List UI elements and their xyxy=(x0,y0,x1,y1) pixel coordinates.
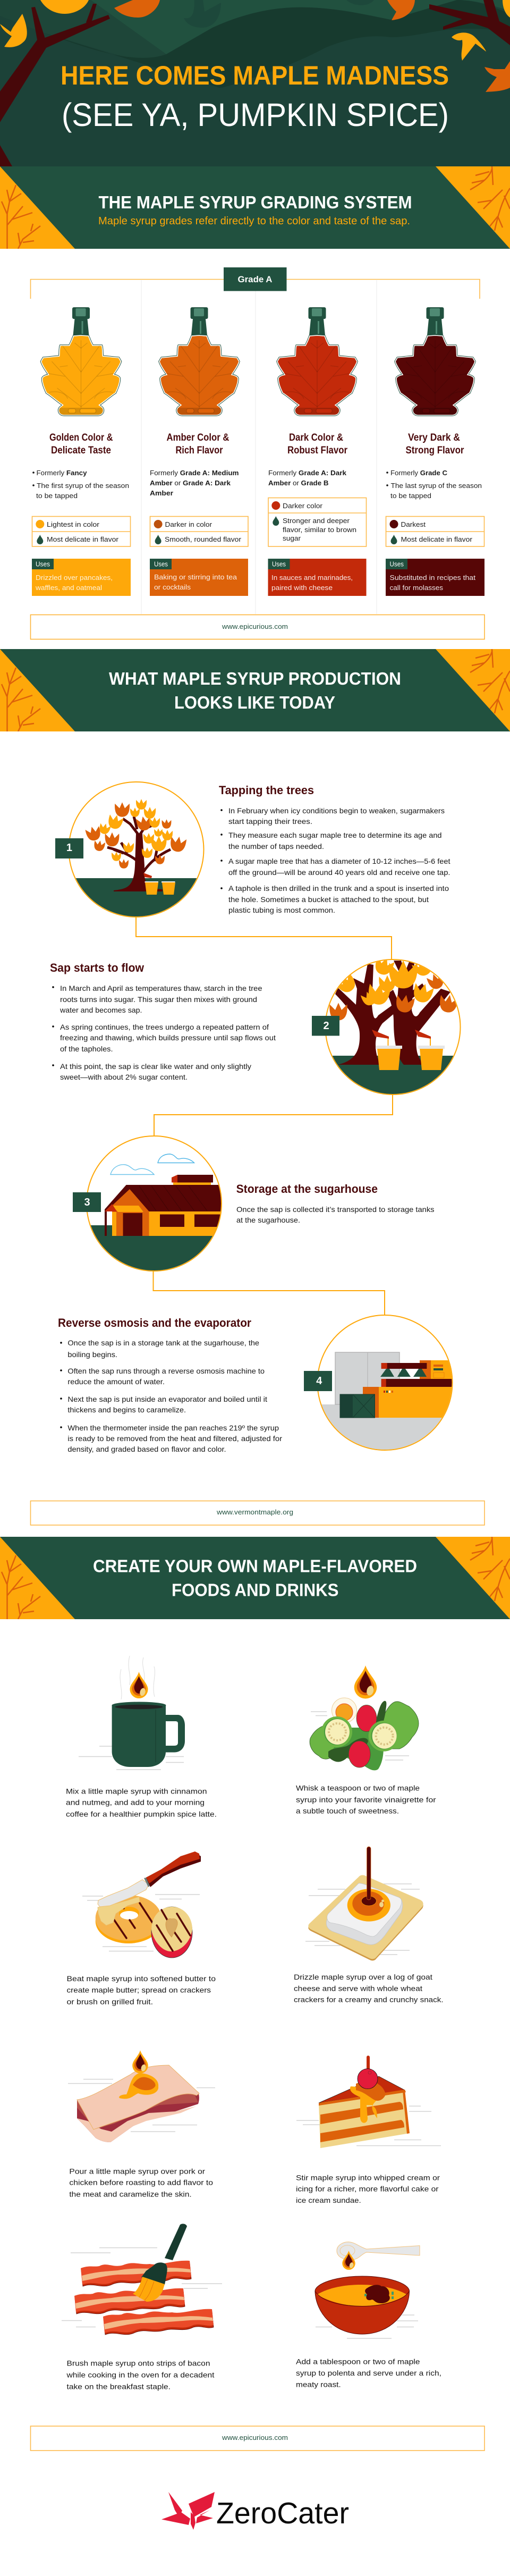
icon: faint leaves xyxy=(184,0,374,28)
step number 2: 2 xyxy=(323,1020,329,1032)
subheading: Maple syrup grades refer directly to the color and taste of the sap. xyxy=(98,215,410,227)
food 6: layered cake xyxy=(296,2056,441,2148)
traits box xyxy=(32,517,131,546)
uses box: paired with cheese xyxy=(271,584,333,592)
source box: epicurious: www.epicurious.com xyxy=(222,622,288,630)
uses box xyxy=(386,559,484,596)
food 4 text: cheese and serve with whole wheat xyxy=(294,1984,422,1992)
section banner: foods and drinks xyxy=(0,1537,510,1619)
icon: amber bottle xyxy=(159,307,239,415)
heading xyxy=(406,432,464,456)
bullets: freezing and thawing, which builds pressure until sap flows out xyxy=(60,1033,276,1042)
food 2 text: a subtle touch of sweetness. xyxy=(296,1806,399,1815)
step number 1 xyxy=(55,838,83,858)
step number 4: 4 xyxy=(316,1375,322,1387)
heading: Reverse osmosis and the evaporator xyxy=(58,1316,251,1329)
uses box: Uses xyxy=(272,560,286,568)
food 7: bacon and brush xyxy=(62,2224,222,2335)
uses box: Uses xyxy=(154,560,168,568)
food 2: salad xyxy=(310,1665,419,1770)
heading: THE MAPLE SYRUP GRADING SYSTEM xyxy=(99,192,412,212)
step 1 illustration: tree xyxy=(69,781,204,917)
heading: Storage at the sugarhouse xyxy=(236,1182,378,1196)
traits box: Darkest xyxy=(401,520,426,528)
uses box: Drizzled over pancakes, xyxy=(36,574,113,582)
heading: LOOKS LIKE TODAY xyxy=(174,693,335,712)
panel: dark grade xyxy=(268,307,367,596)
heading: Robust Flavor xyxy=(287,445,348,456)
food 3 text: or brush on grilled fruit. xyxy=(67,1998,153,2006)
uses box: Baking or stirring into tea xyxy=(154,573,237,581)
food 8 text: syrup to polenta and serve under a rich, xyxy=(296,2369,441,2377)
title: HERE COMES MAPLE MADNESS xyxy=(61,61,449,90)
heading xyxy=(109,669,401,712)
description xyxy=(268,469,347,487)
heading: Tapping the trees xyxy=(219,784,314,797)
bullets: the hole. Sometimes a bucket is attached to the spout, but xyxy=(228,895,429,904)
traits box: Darker color xyxy=(283,502,323,510)
step 2 text xyxy=(50,961,276,1081)
paragraph: at the sugarhouse. xyxy=(236,1216,300,1224)
food 6 text xyxy=(296,2173,440,2204)
food 7 text xyxy=(66,2359,215,2391)
description: Formerly Fancy xyxy=(36,469,87,477)
arrow: connector 1 to 2 xyxy=(136,917,392,959)
paragraph: Once the sap is collected it’s transported to storage tanks xyxy=(236,1205,435,1214)
uses box: waffles, and oatmeal xyxy=(35,584,102,592)
bullets: plastic tubing is most common. xyxy=(228,906,335,914)
bullets: In March and April as temperatures thaw, starch in the tree xyxy=(60,984,262,992)
right tree xyxy=(429,0,510,45)
food 7 text: Brush maple syrup onto strips of bacon xyxy=(67,2359,210,2368)
panel: amber grade xyxy=(150,307,248,596)
bullets: A sugar maple tree that has a diameter of 10-12 inches—5-6 feet xyxy=(228,857,450,865)
traits box: Most delicate in flavor xyxy=(401,535,473,543)
bullets: Next the sap is put inside an evaporator and boiled until it xyxy=(67,1395,267,1403)
food 3 text: Beat maple syrup into softened butter to xyxy=(67,1974,216,1983)
traits box: flavor, similar to brown xyxy=(283,526,356,534)
step 1 text xyxy=(219,784,450,914)
traits box: Most delicate in flavor xyxy=(47,535,119,543)
food 7 text: while cooking in the oven for a decadent xyxy=(66,2371,215,2379)
traits box xyxy=(386,517,484,546)
bullets: start tapping their trees. xyxy=(228,817,312,826)
bullets: At this point, the sap is clear like water and only slightly xyxy=(60,1062,251,1071)
food 6 text: Stir maple syrup into whipped cream or xyxy=(296,2173,440,2182)
food 5 text xyxy=(69,2167,213,2199)
uses box: call for molasses xyxy=(390,584,444,592)
step number 4 xyxy=(304,1371,332,1391)
step 4 text xyxy=(58,1316,282,1453)
heading: Strong Flavor xyxy=(406,445,464,456)
description: Amber xyxy=(150,489,173,497)
heading xyxy=(49,432,113,456)
heading: Golden Color & xyxy=(49,432,113,443)
heading: Dark Color & xyxy=(289,432,343,443)
grade label: Grade A xyxy=(238,274,272,284)
icon: golden bottle xyxy=(41,307,121,415)
panel: golden grade xyxy=(32,307,131,596)
food 1 text: Mix a little maple syrup with cinnamon xyxy=(66,1787,207,1796)
traits box: sugar xyxy=(283,534,301,542)
bullets: When the thermometer inside the pan reaches 219º the syrup xyxy=(67,1424,279,1432)
bullets: water and becomes sap. xyxy=(60,1006,142,1014)
bullets: is ready to be removed from the heat and filtered, adjusted for xyxy=(67,1434,282,1443)
heading: Very Dark & xyxy=(408,432,460,443)
description: Amber or Grade A: Dark xyxy=(150,479,231,487)
bullets: sweet—with about 2% sugar content. xyxy=(60,1073,188,1081)
grade A frame xyxy=(31,267,480,614)
step number 3 xyxy=(73,1192,101,1212)
food 3: maple butter and grilled fruit xyxy=(82,1851,201,1958)
uses box: Substituted in recipes that xyxy=(390,574,475,582)
heading: CREATE YOUR OWN MAPLE-FLAVORED xyxy=(93,1556,417,1576)
step number 3: 3 xyxy=(84,1197,90,1208)
step 3 illustration: sugarhouse xyxy=(85,1136,228,1273)
food 4: goat cheese cracker xyxy=(305,1847,423,1960)
paragraph xyxy=(236,1205,435,1224)
description: Amber or Grade B xyxy=(268,479,328,487)
left tree xyxy=(0,4,110,166)
food 7 text: take on the breakfast staple. xyxy=(67,2383,171,2391)
traits box: Smooth, rounded flavor xyxy=(165,535,242,543)
traits box: Lightest in color xyxy=(47,520,100,528)
bullets: off the ground—will be around 40 years old and receive one tap. xyxy=(228,868,450,877)
title xyxy=(61,61,449,133)
food 3 text: create maple butter; spread on crackers xyxy=(67,1986,211,1994)
uses box: Uses xyxy=(390,560,404,568)
description: to be tapped xyxy=(390,492,431,500)
heading xyxy=(93,1556,417,1600)
food 1 text: coffee for a healthier pumpkin spice latte. xyxy=(66,1809,217,1818)
food 1 text xyxy=(66,1787,217,1818)
step number 2 xyxy=(312,1016,339,1036)
section banner: production xyxy=(0,649,510,731)
description: The last syrup of the season xyxy=(391,482,482,490)
traits box: Darker in color xyxy=(165,520,212,528)
food 6 text: icing for a richer, more flavorful cake or xyxy=(296,2185,439,2193)
traits box xyxy=(150,517,248,546)
food 8 text: Add a tablespoon or two of maple xyxy=(296,2357,420,2365)
icon: origami crane xyxy=(162,2492,215,2530)
bullets: boiling begins. xyxy=(67,1350,117,1359)
description: to be tapped xyxy=(36,492,78,500)
bullets: They measure each sugar maple tree to determine its age and xyxy=(228,831,442,839)
description: Formerly Grade A: Medium xyxy=(150,469,239,477)
icon: dark bottle xyxy=(277,307,357,415)
description: The first syrup of the season xyxy=(37,482,129,490)
heading: Rich Flavor xyxy=(175,445,223,456)
bullets: thickens and begins to caramelize. xyxy=(67,1405,186,1414)
step 3 text xyxy=(236,1182,435,1224)
food 2 text xyxy=(296,1784,436,1815)
icon: hero leaves xyxy=(0,0,510,92)
bullets xyxy=(60,1338,282,1453)
source box: epicurious xyxy=(31,614,484,639)
heading: FOODS AND DRINKS xyxy=(172,1580,339,1600)
uses box xyxy=(268,559,367,596)
description xyxy=(386,469,482,500)
wordmark: ZeroCater xyxy=(216,2496,349,2530)
food 8: polenta bowl and spoon xyxy=(0,2091,420,2338)
arrow: connector 2 to 3 xyxy=(154,1095,393,1136)
food 8 text: meaty roast. xyxy=(296,2380,341,2389)
heading xyxy=(287,432,348,456)
bullets: As spring continues, the trees undergo a repeated pattern of xyxy=(60,1023,269,1031)
traits box xyxy=(268,498,367,546)
step 4 illustration: evaporator xyxy=(313,1315,457,1452)
bullets: Often the sap runs through a reverse osmosis machine to xyxy=(67,1367,265,1375)
bullets: A taphole is then drilled in the trunk and a spout is inserted into xyxy=(228,884,449,893)
bullets: roots turns into sugar. This sugar then mixes with ground xyxy=(60,995,257,1004)
food 1: coffee mug xyxy=(79,1656,185,1770)
description xyxy=(32,469,129,500)
traits box: Stronger and deeper xyxy=(283,517,350,525)
heading: Delicate Taste xyxy=(51,445,111,456)
bullets: of the tapholes. xyxy=(60,1045,113,1053)
panel: very dark grade xyxy=(386,307,484,596)
description: Formerly Grade C xyxy=(390,469,448,477)
food 4 text: crackers for a creamy and crunchy snack. xyxy=(294,1996,444,2004)
bullets xyxy=(220,806,450,914)
food 2 text: syrup into your favorite vinaigrette for xyxy=(296,1796,436,1804)
bullets: density, and graded based on flavor and color. xyxy=(67,1445,226,1453)
bullets: In February when icy conditions begin to weaken, sugarmakers xyxy=(228,806,445,815)
step 2 illustration: tapped trees xyxy=(324,955,462,1098)
uses box: In sauces and marinades, xyxy=(271,574,353,582)
uses box xyxy=(150,559,248,596)
food 5 text: Pour a little maple syrup over pork or xyxy=(69,2167,205,2175)
source box: vermontmaple xyxy=(31,1501,484,1525)
heading: Sap starts to flow xyxy=(50,961,144,974)
logo: ZeroCater xyxy=(162,2492,349,2530)
uses box xyxy=(32,559,131,596)
food 2 text: Whisk a teaspoon or two of maple xyxy=(296,1784,420,1792)
step number 1: 1 xyxy=(66,842,72,854)
uses box: or cocktails xyxy=(154,583,191,591)
heading: WHAT MAPLE SYRUP PRODUCTION xyxy=(109,669,401,688)
bullets: reduce the amount of water. xyxy=(67,1377,165,1386)
food 5: pork xyxy=(68,2050,215,2142)
food 4 text xyxy=(294,1973,444,2004)
food 4 text: Drizzle maple syrup over a log of goat xyxy=(294,1973,432,1981)
hero panel xyxy=(0,0,510,166)
food 5 text: chicken before roasting to add flavor to xyxy=(69,2178,213,2187)
food 1 text: and nutmeg, and add to your morning xyxy=(66,1798,205,1806)
food 6 text: ice cream sundae. xyxy=(296,2196,361,2204)
heading: Amber Color & xyxy=(167,432,230,443)
source box: epicurious xyxy=(31,2426,484,2451)
food 3 text xyxy=(67,1974,216,2006)
food 8 text xyxy=(296,2357,441,2389)
uses box: Uses xyxy=(36,560,50,568)
icon: very dark bottle xyxy=(395,307,475,415)
bullets: the number of taps needed. xyxy=(228,842,324,851)
food 5 text: the meat and caramelize the skin. xyxy=(69,2190,192,2199)
description xyxy=(150,469,239,497)
section banner: grading system xyxy=(0,166,510,249)
source box: vermontmaple: www.vermontmaple.org xyxy=(216,1508,293,1516)
arrow: connector 3 to 4 xyxy=(153,1271,385,1315)
title: (SEE YA, PUMPKIN SPICE) xyxy=(62,97,449,133)
source box: epicurious: www.epicurious.com xyxy=(222,2434,288,2442)
heading xyxy=(167,432,230,456)
bullets xyxy=(52,984,276,1081)
bullets: Once the sap is in a storage tank at the sugarhouse, the xyxy=(67,1338,259,1347)
description: Formerly Grade A: Dark xyxy=(268,469,347,477)
